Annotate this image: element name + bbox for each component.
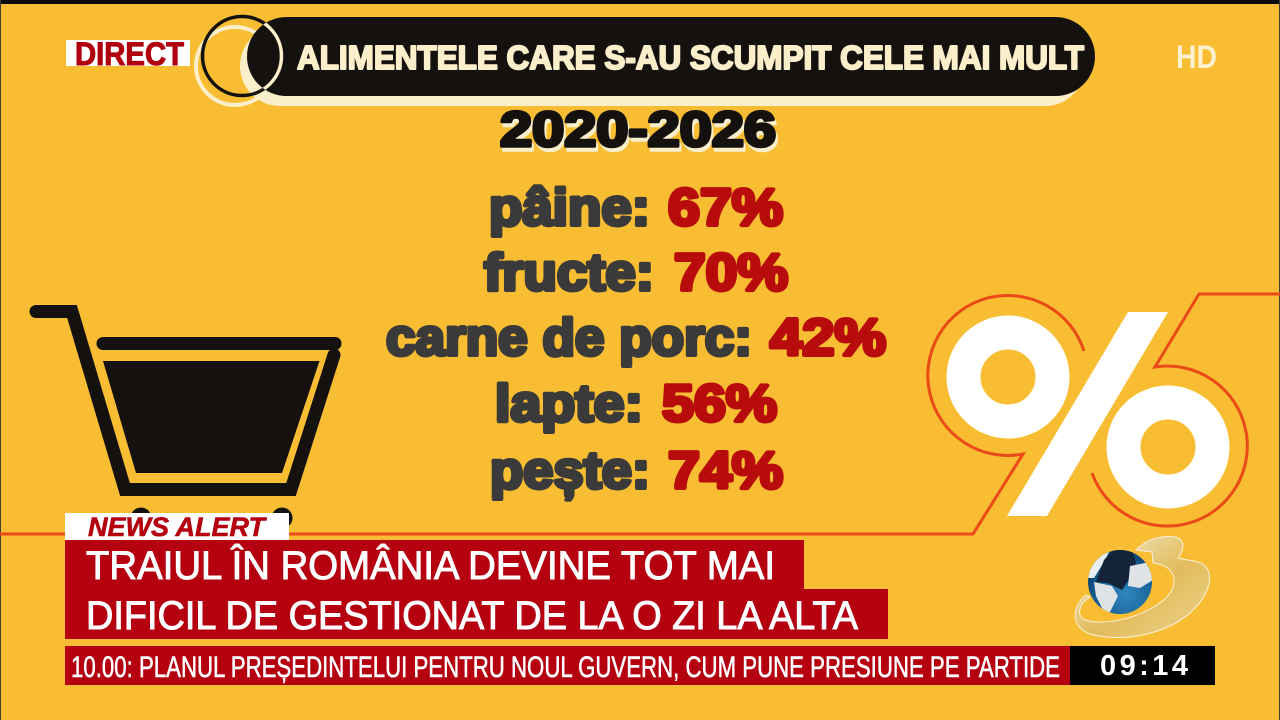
row: paine: [489, 179, 783, 237]
row: fructe: 70%: [674, 244, 788, 302]
row: peste: 74%: [668, 442, 783, 500]
row: peste: pește:: [490, 442, 650, 500]
clock: 09:14: [1100, 650, 1188, 682]
icon: channel logo: [1075, 537, 1210, 637]
clock: [1070, 646, 1215, 685]
icon: shopping cart: [36, 312, 335, 528]
row: carne de porc: 42%: [770, 309, 886, 367]
HD mark: HD: [1176, 39, 1217, 75]
headline: TRAIUL ÎN ROMÂNIA DEVINE TOT MAI: [86, 543, 775, 588]
title banner: [196, 16, 1095, 106]
row: fructe: [484, 244, 788, 302]
row: carne de porc: carne de porc:: [386, 309, 752, 367]
row: paine: 67%: [668, 179, 783, 237]
banner pill: [247, 17, 1095, 96]
headline: [65, 540, 888, 639]
row: lapte: [495, 375, 777, 433]
price list: [386, 179, 886, 500]
period heading: 2020-2026: [500, 103, 776, 157]
news alert tag: NEWS ALERT: [88, 512, 267, 542]
banner heading: ALIMENTELE CARE S-AU SCUMPIT CELE MAI MULT: [297, 39, 1084, 76]
live badge: DIRECT: DIRECT: [75, 36, 184, 72]
row: fructe: fructe:: [484, 244, 654, 302]
row: lapte: 56%: [662, 375, 777, 433]
row: paine: pâine:: [489, 179, 650, 237]
period heading: 2020-2026: [502, 107, 778, 161]
icon: percent sign: [964, 312, 1212, 516]
banner shadow: [196, 26, 1085, 106]
row: peste: [490, 442, 783, 500]
row: lapte: lapte:: [495, 375, 643, 433]
overlapping ring: [202, 16, 282, 96]
orange line with percent outline: [0, 294, 1280, 534]
headline: DIFICIL DE GESTIONAT DE LA O ZI LA ALTA: [86, 594, 858, 638]
